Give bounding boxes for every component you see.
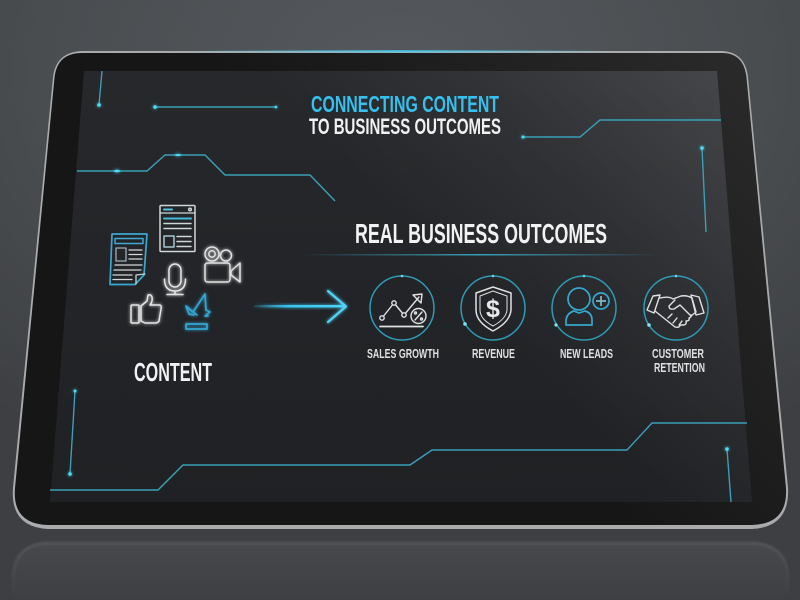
icon: thumbs up [131,295,161,323]
label: RETENTION [654,360,705,375]
circuit nodes [68,103,729,476]
content label: CONTENT [134,357,212,387]
icon: growth chart [380,294,426,326]
arrow [254,291,346,322]
label: CUSTOMER [652,346,704,361]
icon: blue award [186,294,210,329]
label: NEW LEADS [560,346,613,361]
tablet reflection [13,543,788,600]
title [309,91,501,139]
title: TO BUSINESS OUTCOMES [309,114,501,139]
icon: browser window [160,206,195,252]
heading: real business outcomes: REAL BUSINESS OUTCOMES [355,218,607,249]
outcome: customer retention [644,275,708,375]
outcome: revenue [461,275,525,361]
label [652,346,705,375]
title: CONNECTING CONTENT [311,91,499,117]
icon: person with plus [566,288,609,325]
content icons [110,206,240,329]
top edge glow [190,50,610,52]
icon: handshake [647,295,704,327]
tablet device [13,50,788,529]
screen [50,71,752,502]
circuit lines [50,71,747,502]
icon: shield with dollar: $ [486,295,500,323]
icon: document [110,234,147,284]
outcome: sales growth [367,275,439,361]
icon: microphone [164,264,186,294]
label: SALES GROWTH [367,346,439,361]
icon: video camera [205,247,240,282]
label: REVENUE [472,346,515,361]
outcome: new leads [552,275,616,361]
